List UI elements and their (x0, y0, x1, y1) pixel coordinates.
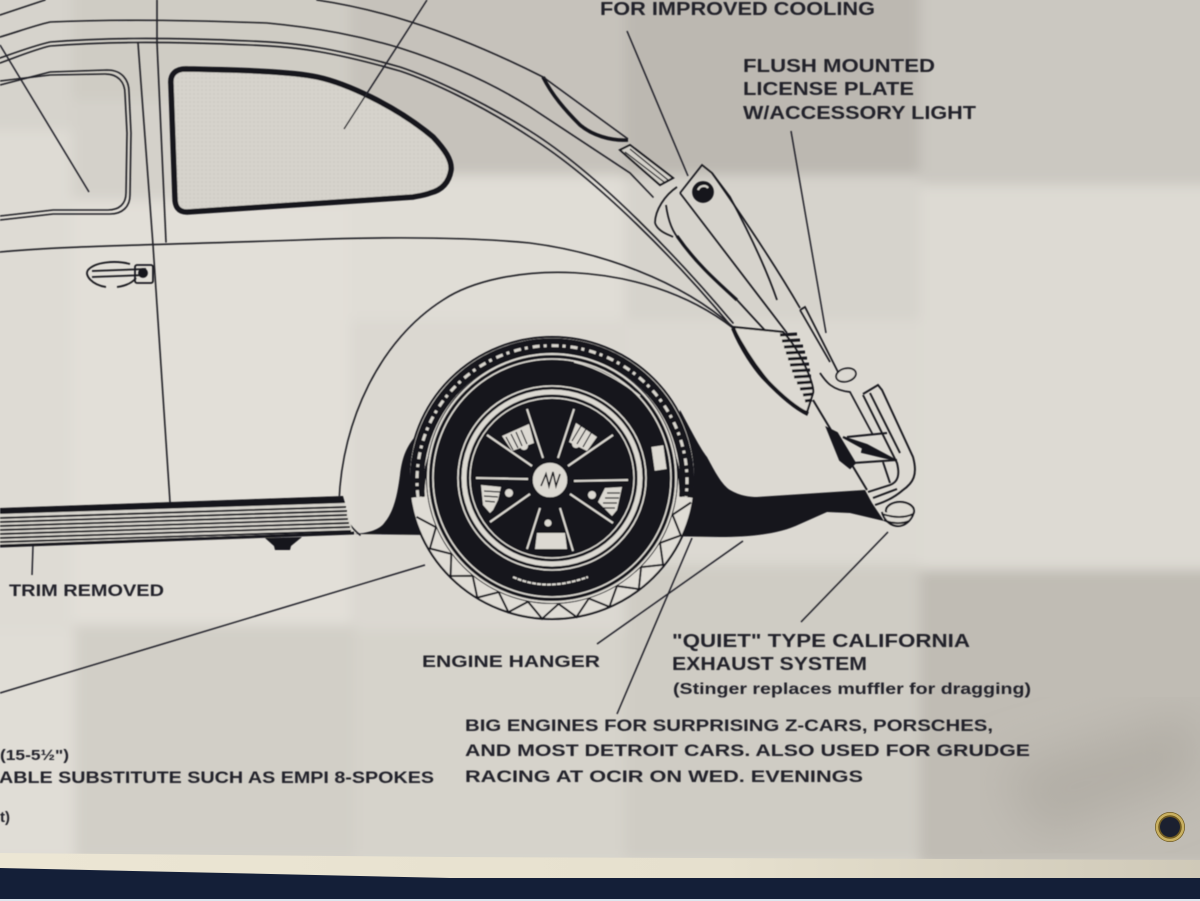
label: licence plate: LICENSE PLATE (743, 79, 914, 99)
spokes (476, 409, 628, 551)
grommet (1155, 812, 1185, 842)
label: wheels (0, 747, 434, 826)
wheel hub (532, 462, 568, 498)
label: exhaust: EXHAUST SYSTEM (672, 654, 867, 674)
engine hanger black fill (660, 410, 884, 537)
label: exhaust (672, 631, 1031, 698)
label: exhaust: "QUIET" TYPE CALIFORNIA (672, 631, 970, 651)
running board (0, 496, 354, 547)
door handle (87, 262, 153, 287)
jack point (265, 537, 302, 550)
label: licence plate: W/ACCESSORY LIGHT (743, 103, 976, 123)
label: wheels: (15-5½") (0, 747, 69, 764)
side window frame (0, 70, 131, 220)
label: trim removed: TRIM REMOVED (9, 581, 164, 600)
label: licence plate (743, 56, 976, 123)
label: big engines (465, 716, 1030, 786)
wheel (409, 337, 695, 619)
leader lines (0, 0, 888, 714)
rear quarter window (171, 69, 451, 212)
licence plate light (800, 307, 873, 435)
label: wheels: ABLE SUBSTITUTE SUCH AS EMPI 8-SPOKES (0, 768, 434, 787)
engine vent louvres (543, 77, 673, 185)
label: exhaust: (Stinger replaces muffler for dragging) (673, 681, 1031, 698)
label: licence plate: FLUSH MOUNTED (743, 56, 935, 76)
label: big engines: BIG ENGINES FOR SURPRISING Z-CARS, PORSCHES, (465, 716, 993, 735)
hem and dark backdrop (0, 853, 1200, 901)
bumper bracket and exhaust tailpipe (813, 385, 915, 526)
tire (409, 337, 695, 619)
tread zigzag (416, 502, 691, 619)
label: big engines: RACING AT OCIR ON WED. EVENINGS (465, 767, 863, 786)
label: engine hanger: ENGINE HANGER (422, 652, 600, 671)
car body outline (0, 0, 733, 535)
engine lid and handle (655, 165, 800, 350)
left black fender fill (354, 438, 430, 535)
wheel vents (481, 423, 622, 549)
label: wheels: t) (0, 809, 10, 826)
label: big engines: AND MOST DETROIT CARS. ALSO USED FOR GRUDGE (465, 741, 1030, 760)
tail light (733, 327, 813, 414)
rim rings (458, 386, 646, 570)
sidewall brand and marks (651, 445, 667, 471)
